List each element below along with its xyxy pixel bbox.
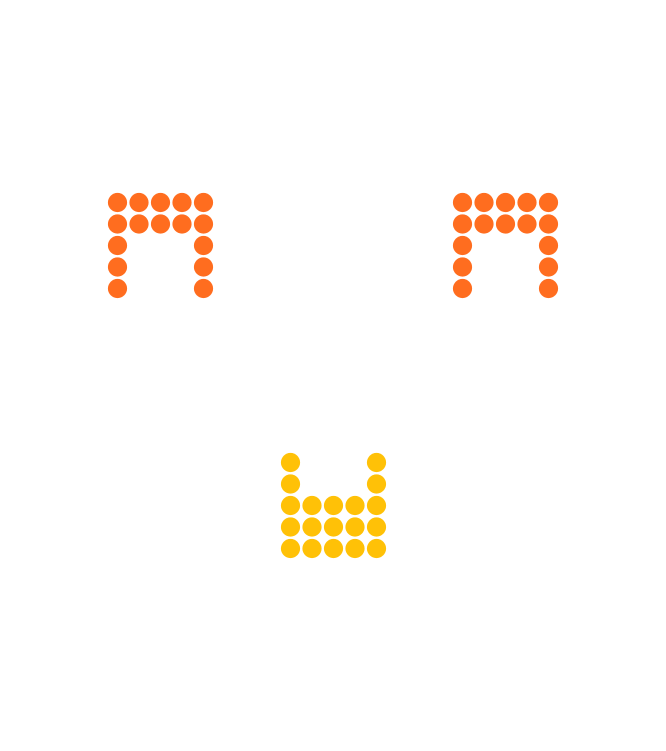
orange dot glyph, right	[453, 193, 558, 298]
orange dot glyph, left	[108, 193, 213, 298]
yellow dot glyph, bottom centre	[281, 453, 386, 558]
